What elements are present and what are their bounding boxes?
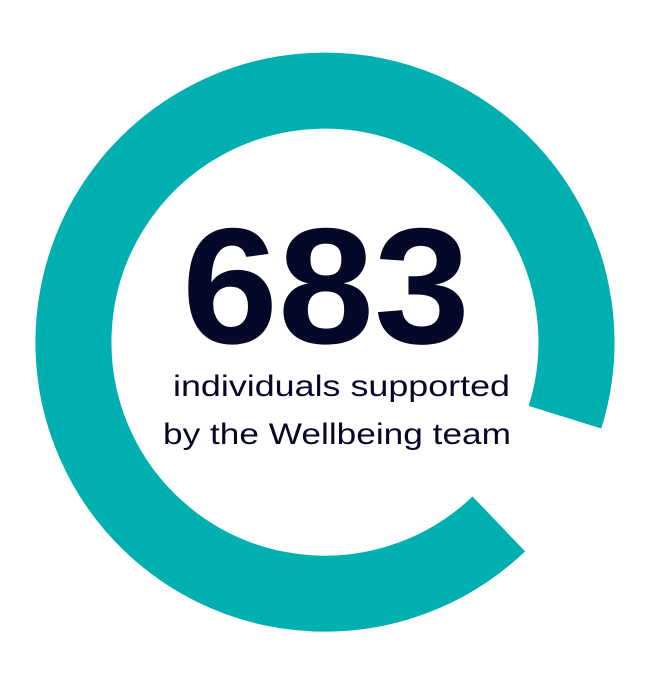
caption (163, 370, 511, 451)
caption: by the Wellbeing team (163, 418, 511, 451)
caption: individuals supported (173, 370, 510, 403)
ring: progress arc (73, 91, 576, 594)
big number: 683 (182, 194, 470, 378)
